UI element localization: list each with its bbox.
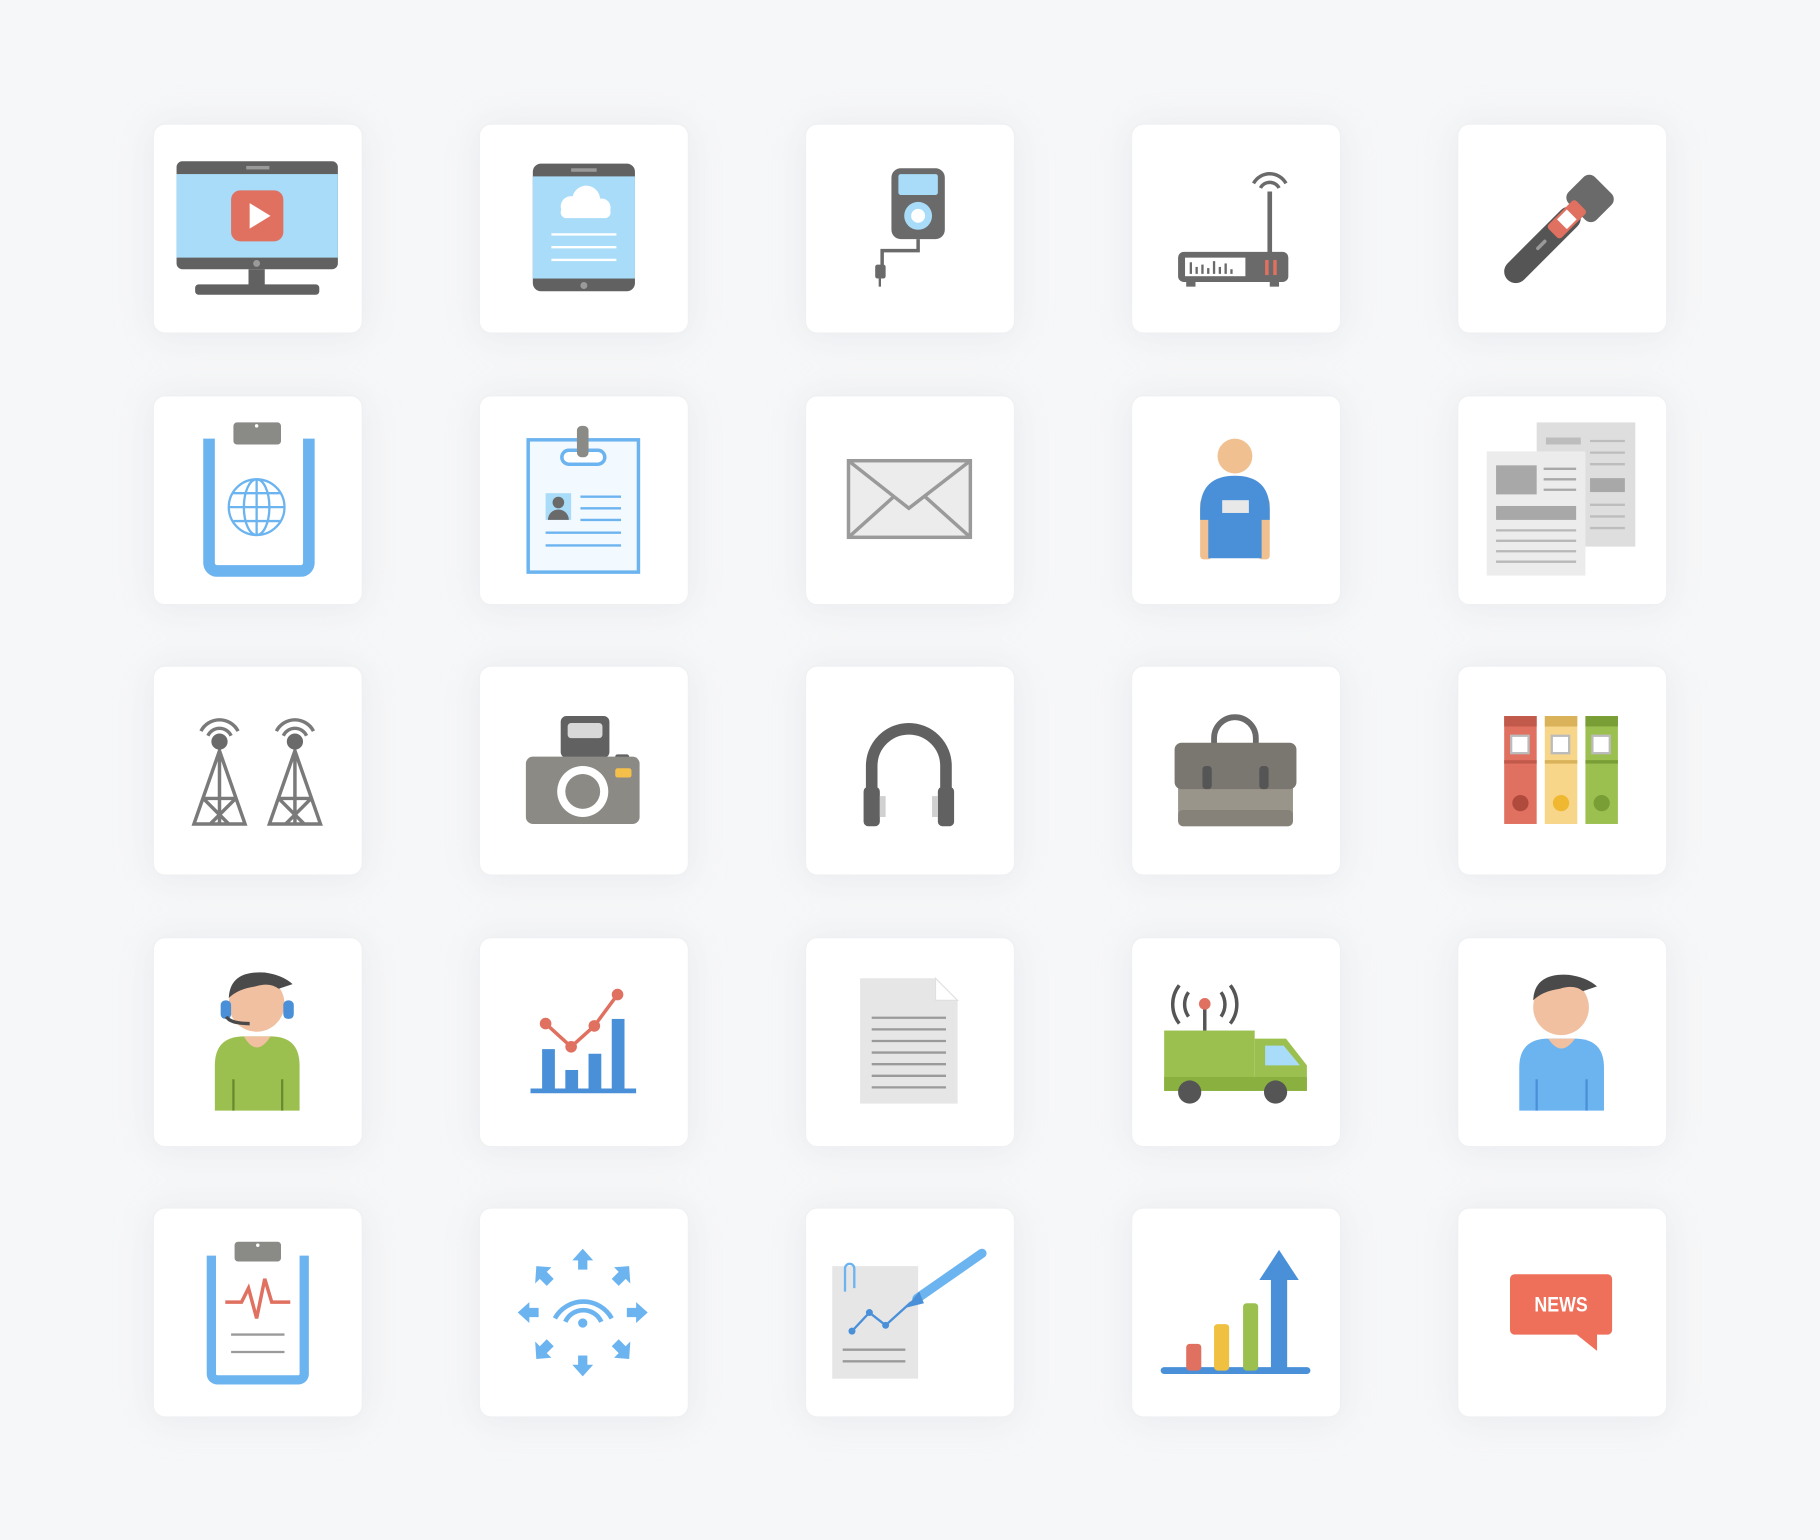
icon: ID badge — [528, 426, 638, 572]
icon: camera — [526, 716, 640, 824]
icon: newspapers — [1487, 422, 1635, 576]
icon: staff person — [1200, 439, 1270, 559]
icon: globe clipboard — [209, 422, 309, 571]
icon: document — [860, 978, 958, 1104]
icon: microphone — [1516, 171, 1617, 272]
icon: health clipboard — [211, 1242, 304, 1380]
icon: envelope — [848, 461, 970, 537]
icon: signed report — [832, 1253, 982, 1379]
icon: cloud tablet — [533, 164, 635, 291]
icon: wifi router — [1178, 174, 1288, 287]
icon: mp3 player — [875, 168, 945, 287]
icon: user — [1519, 975, 1604, 1111]
icon: video monitor — [177, 161, 338, 295]
icon: headphones — [864, 729, 954, 826]
icon: growth chart — [531, 989, 636, 1091]
icon: rising bar chart — [1164, 1250, 1307, 1371]
icon: news bubble — [1510, 1274, 1612, 1351]
icon: binders — [1504, 716, 1618, 824]
icon: broadcast towers — [194, 720, 320, 824]
icon: broadcast truck — [1164, 985, 1307, 1104]
icon: briefcase — [1175, 717, 1296, 826]
icon: news bubble: NEWS — [1534, 1293, 1588, 1316]
icon: wireless network — [518, 1249, 648, 1376]
icon: support agent — [215, 972, 300, 1111]
